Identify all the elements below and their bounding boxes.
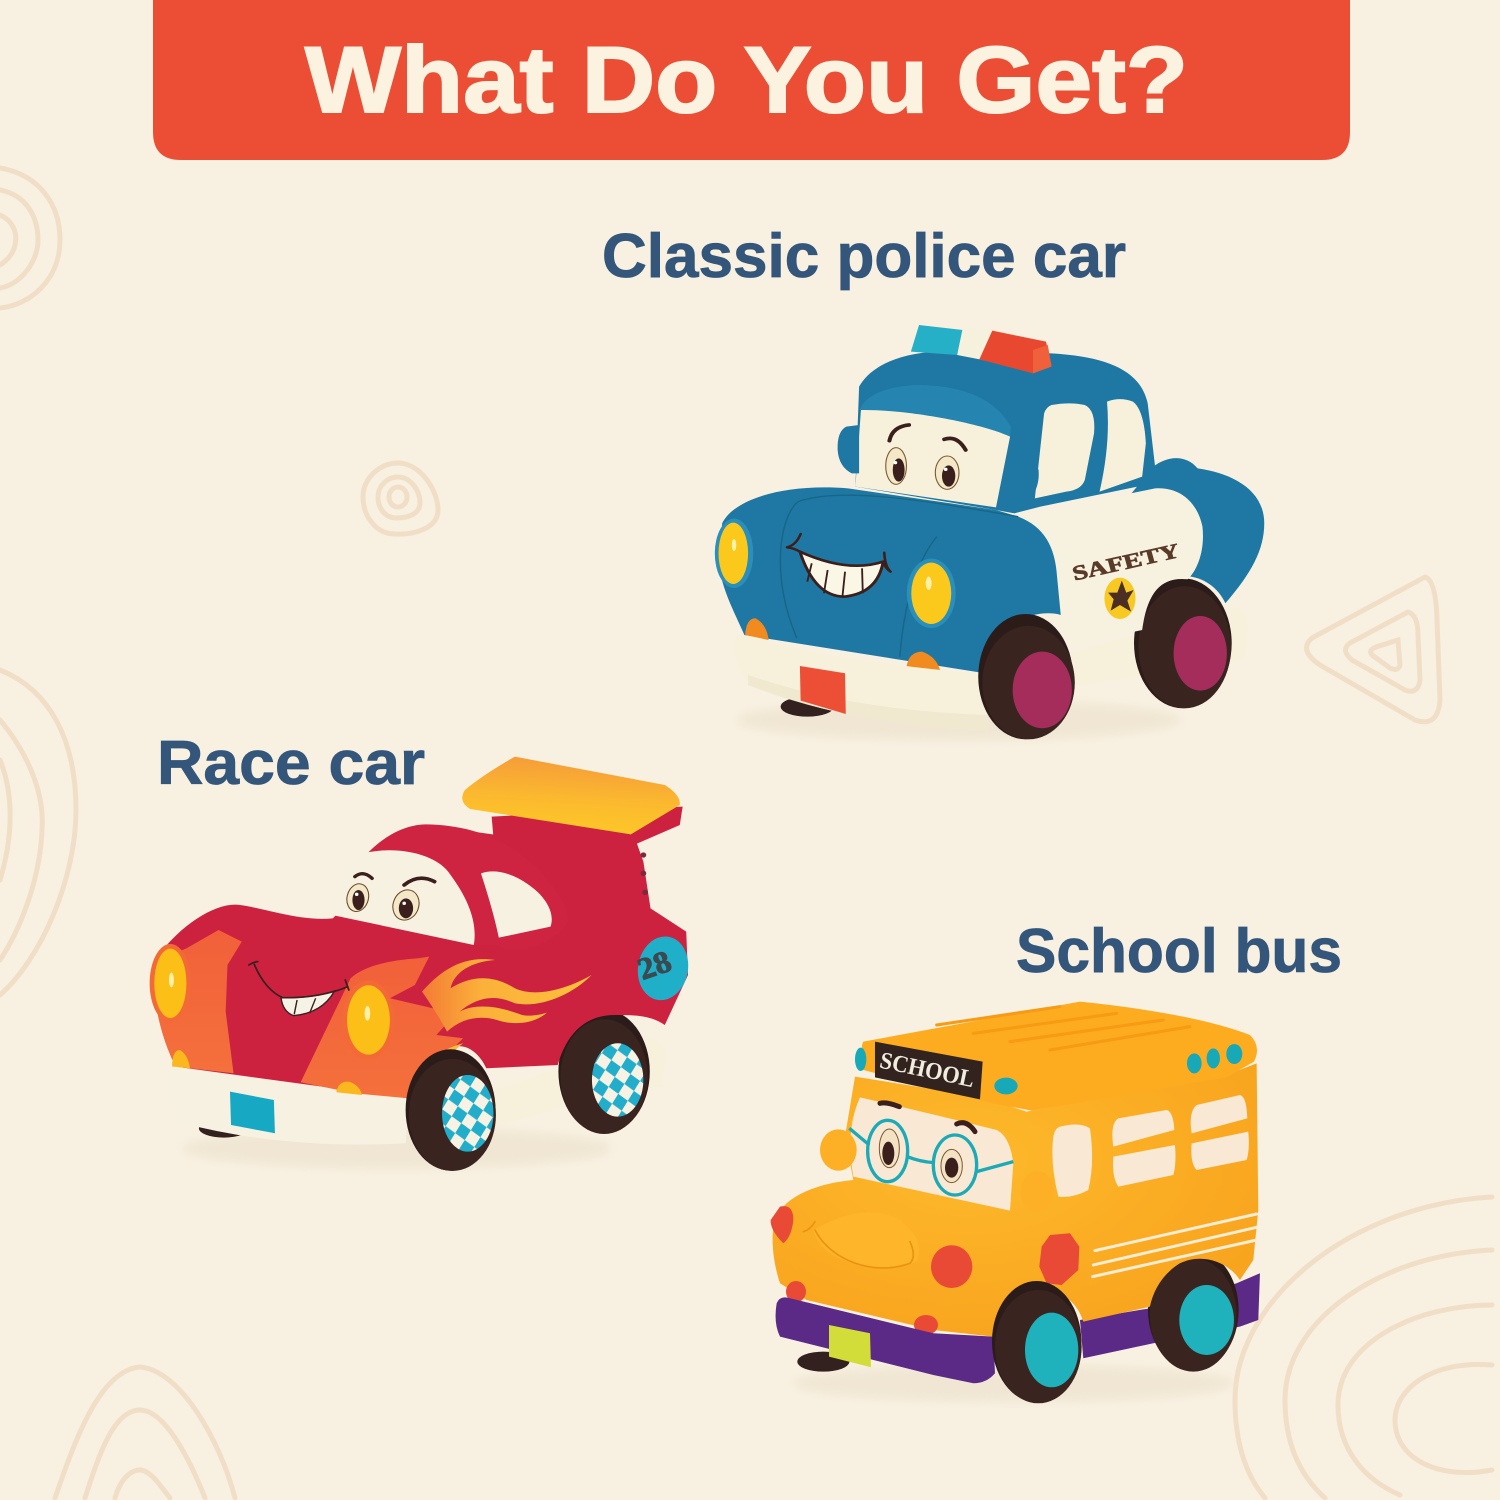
hood and front fender (718, 487, 1061, 673)
underside wheel (797, 1352, 849, 1372)
turn signals (172, 1050, 362, 1095)
body (155, 825, 688, 1098)
beacon lights (911, 325, 1052, 373)
windshield (855, 410, 1010, 507)
rear bumper (1070, 607, 1248, 687)
cab (855, 351, 1155, 513)
police face eyes (886, 425, 966, 489)
school bus toy (771, 1002, 1260, 1403)
windshield (332, 850, 475, 945)
rear bumper (1080, 1273, 1260, 1358)
front bumper (735, 635, 988, 731)
rear wheel (1148, 1249, 1239, 1372)
number roundel (633, 933, 693, 1003)
bus red lights (771, 1206, 1079, 1335)
side windows (1052, 1095, 1249, 1197)
side stripes (1093, 1214, 1257, 1277)
title: What Do You Get? (305, 27, 1188, 132)
spoiler wing (462, 757, 680, 834)
left orange panel (154, 930, 242, 1073)
underside wheel (199, 1119, 249, 1138)
front bumper (776, 1297, 995, 1383)
label: race car: Race car (157, 729, 425, 798)
school sign (875, 1042, 983, 1099)
mirrors (838, 425, 1039, 504)
label: school bus: School bus (1016, 917, 1342, 986)
headlights (715, 519, 956, 628)
rear wheel (558, 1010, 650, 1134)
rear bumper (490, 1038, 666, 1125)
underside wheel (781, 697, 834, 717)
license plate (230, 1092, 275, 1133)
front wheel (992, 1281, 1082, 1403)
roof (862, 1002, 1257, 1111)
race car eyes (344, 874, 435, 923)
side windows (1035, 399, 1146, 498)
glasses and eyes (849, 1103, 1013, 1195)
front wheel (406, 1049, 496, 1171)
white door panel (1018, 488, 1203, 645)
front wheel (978, 614, 1075, 739)
race car toy (150, 757, 693, 1171)
license plate (829, 1325, 871, 1367)
school sign text: SCHOOL (877, 1048, 977, 1093)
rear fender (1107, 458, 1264, 603)
badge star (1104, 578, 1135, 619)
police car toy (715, 325, 1264, 740)
cab (333, 824, 568, 950)
roof marker lights (855, 1044, 1242, 1094)
title banner (153, 0, 1350, 160)
smiling grille (803, 1212, 919, 1268)
bus side and front body (773, 1063, 1258, 1337)
right orange panel (301, 957, 463, 1098)
headlights (150, 944, 395, 1059)
side window (481, 871, 552, 938)
flames (422, 959, 592, 1067)
front bumper (166, 1067, 408, 1145)
license plate (800, 666, 846, 714)
hood (225, 919, 436, 1082)
safety lettering: SAFETY (1070, 539, 1182, 585)
windshield (850, 1097, 1013, 1211)
racing number: 28 (633, 944, 676, 986)
label: classic police car: Classic police car (602, 222, 1126, 291)
rear wheel (1134, 578, 1232, 708)
rear spoiler support (492, 807, 683, 920)
turn signals (745, 618, 940, 672)
race car smile (249, 962, 349, 1016)
side mirrors (820, 1129, 1054, 1212)
smile (787, 534, 891, 597)
